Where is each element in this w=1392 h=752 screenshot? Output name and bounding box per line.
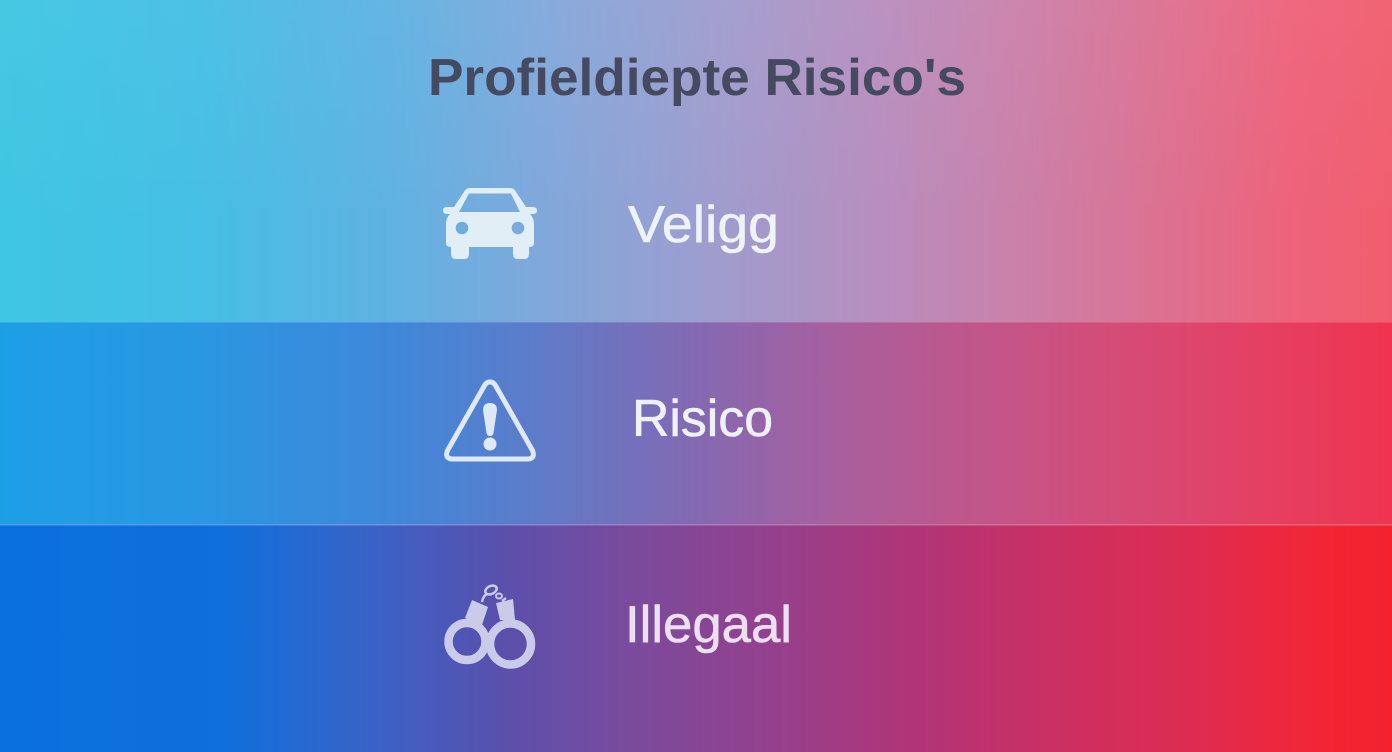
label: Risico: Risico	[632, 390, 773, 448]
icon: car	[443, 188, 537, 259]
icon: handcuffs	[448, 584, 531, 664]
label: Veligg: Veligg	[628, 196, 779, 254]
label: Illegaal: Illegaal	[625, 596, 792, 654]
icon: warning triangle	[447, 382, 533, 459]
panel: illegal band background	[0, 524, 1392, 752]
title: Profieldiepte Risico's	[428, 49, 966, 107]
panel: safe band background	[0, 0, 1392, 322]
panel: risk band background	[0, 322, 1392, 524]
